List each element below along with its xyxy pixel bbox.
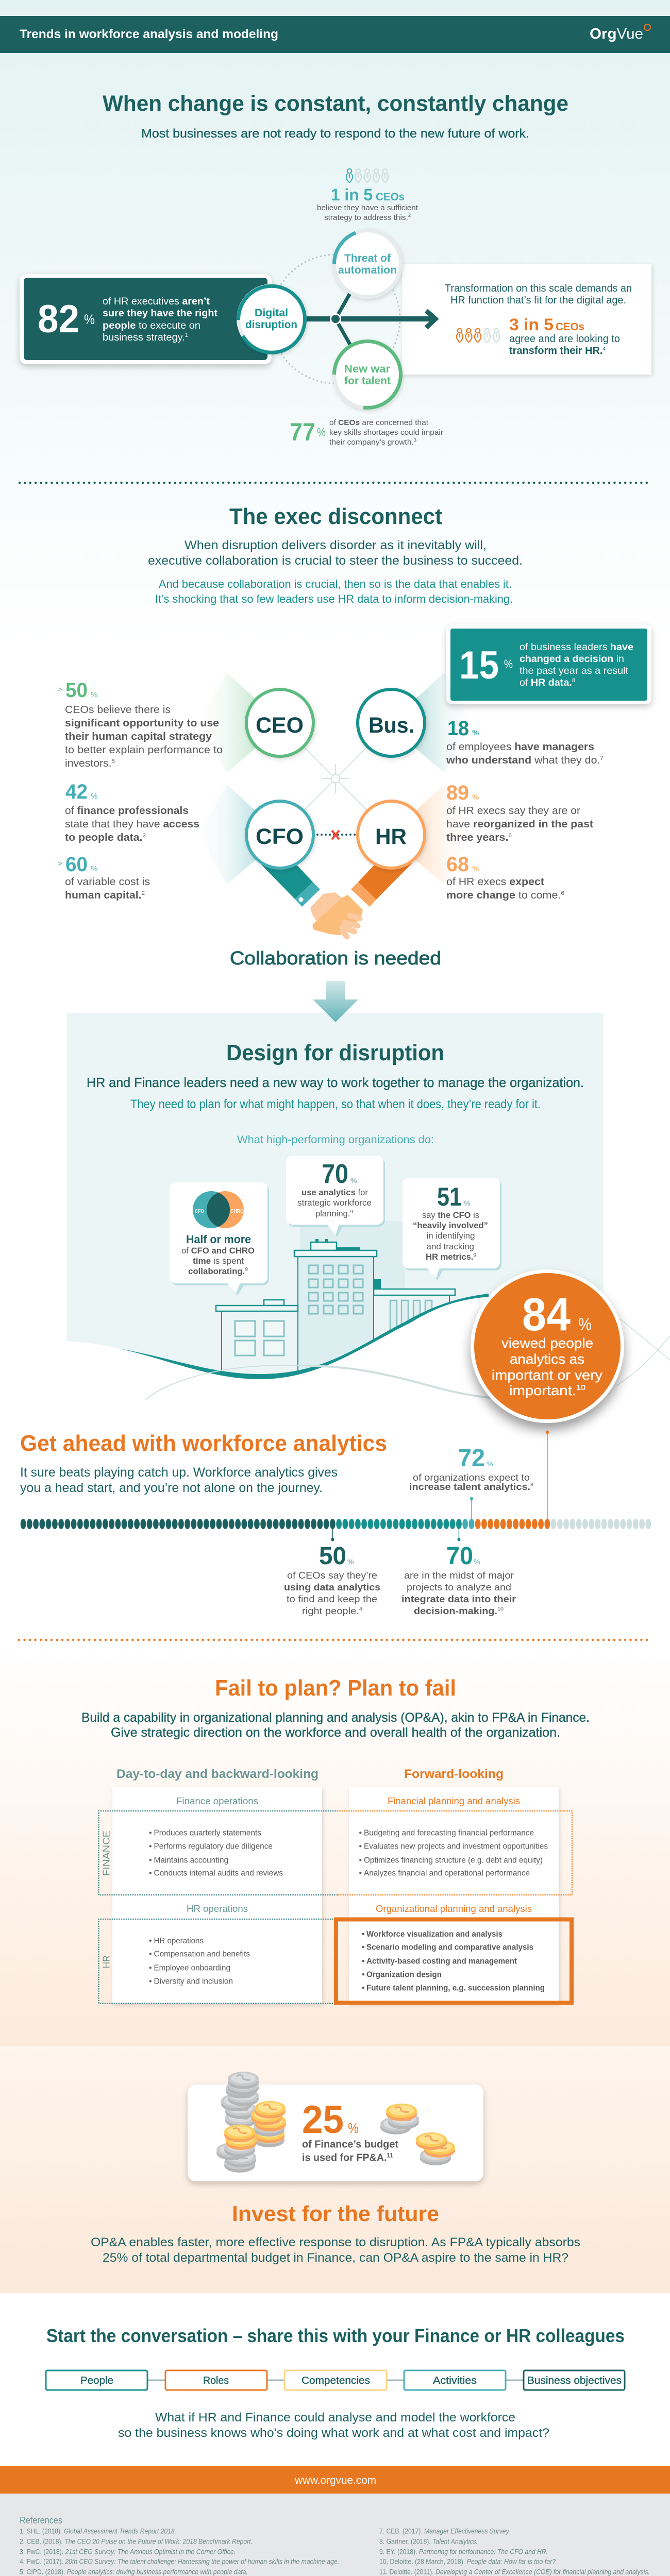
callout: 70%: % (350, 1176, 357, 1184)
design intro text: They need to plan for what might happen, so that when it does, they’re ready for it. (130, 1097, 541, 1111)
stat: 42%: of finance professionals (65, 805, 189, 817)
column heading: day-to-day: Day-to-day and backward-looking (116, 1767, 319, 1781)
top section background (0, 0, 670, 644)
financial planning and analysis: • (359, 1842, 362, 1851)
stat: 77% of CEOs: 3 (414, 437, 416, 443)
stat box: 15%: 8 (572, 677, 575, 684)
footer bar: website (0, 2466, 670, 2494)
reference list: left column: 1. SHL. (2018). Global Assessment Trends Report 2018. (20, 2528, 176, 2535)
HR operations: • (149, 1950, 152, 1959)
box: competencies: Competencies (301, 2375, 370, 2386)
arrow: down into design section (313, 981, 358, 1022)
broken link: CFO to HR (313, 831, 358, 839)
financial planning and analysis (359, 1795, 548, 1877)
HR operations: Diversity and inclusion (154, 1977, 233, 1986)
organizational planning and analysis: Organizational planning and analysis (376, 1903, 532, 1914)
stat: 42%: 2 (142, 833, 146, 839)
panel: 25 percent card: % (348, 2120, 359, 2136)
stat: 89%: % (472, 793, 479, 802)
stat: 18%: 7 (600, 755, 604, 761)
callout circle: 84%: viewed people (501, 1335, 593, 1351)
stat: more than 50%: to better explain performance to (65, 744, 223, 756)
stat: 70% in major projects: integrate data into their (401, 1594, 516, 1604)
organizational planning and analysis: Future talent planning, e.g. succession planning (366, 1984, 545, 1993)
organizational planning and analysis: • (362, 1970, 365, 1979)
callout: 51% (403, 1178, 501, 1280)
box: roles (165, 2370, 267, 2390)
grey background curves (145, 1319, 670, 1400)
dotted frame: finance row (99, 1811, 572, 1895)
organizational planning and analysis: Activity-based costing and management (366, 1957, 517, 1966)
callout: 70%: 70 (322, 1159, 348, 1189)
text: closing question (118, 2411, 549, 2440)
callout: 70% (286, 1156, 385, 1237)
stat: 1 in 5 CEOs: strategy to address this. (324, 213, 406, 222)
reference list: left column: 5. CIPD. (2018). People analytics: driving business performance with people data. (20, 2568, 248, 2576)
icon: coin stack left (216, 2072, 286, 2173)
stat: 68%: 6 (561, 890, 564, 896)
finance operations: Performs regulatory due diligence (154, 1842, 273, 1851)
stat: more than 60% (58, 853, 150, 901)
reference list: left column: 2. CEB. (2018). The CEO 20 Pulse on the Future of Work: 2018 Benchmark Report. (20, 2538, 253, 2545)
text: fail to plan intro: Build a capability in organizational planning and analysis (OP&A), akin to FP&A in Finance. (81, 1710, 590, 1725)
HR operations: • (149, 1964, 152, 1972)
chart: 100 pill percentage scale (20, 1519, 651, 1529)
marker: 70 percent (457, 1529, 460, 1541)
finance operations: Finance operations (176, 1795, 258, 1806)
dotted frame: HR row (99, 1919, 335, 2003)
panel: transformation: CEOs (556, 321, 584, 333)
circle: CEO: CEO (256, 713, 304, 738)
stat: 89%: three years. (446, 832, 504, 843)
panel: forward-looking column (349, 1787, 559, 2004)
illustration: office buildings (216, 1239, 455, 1393)
HR operations: HR operations (187, 1903, 248, 1914)
circle: digital disruption (237, 285, 306, 354)
reference list: left column: 3. PwC. (2018). 21st CEO Survey: The Anxious Optimist in the Corner Office. (20, 2548, 236, 2555)
organizational planning and analysis: • (362, 1930, 365, 1939)
stat: 1 in 5 CEOs (317, 169, 418, 222)
icon: five people, three highlighted (457, 329, 499, 342)
stat: more than 50%: investors. (65, 758, 109, 769)
stat: 77% of CEOs: key skills shortages could impair (329, 428, 443, 437)
text: get ahead intro (20, 1465, 338, 1495)
finance operations (149, 1795, 283, 1877)
circle: CFO: CFO (256, 824, 304, 849)
stat box: 15%: % (504, 657, 513, 671)
text: get ahead intro: It sure beats playing catch up. Workforce analytics gives (20, 1465, 338, 1480)
box: roles: Roles (203, 2375, 229, 2386)
box: activities: Activities (433, 2375, 477, 2386)
text: fail to plan intro (81, 1710, 590, 1740)
stat: 89% (446, 782, 593, 843)
section background: fail to plan (0, 1649, 670, 2046)
stat: 42%: state that they have access (65, 819, 199, 830)
stat: 50% of CEOs: right people. (302, 1605, 355, 1616)
stat: 18%: % (472, 728, 479, 737)
stat: 68%: more change to come. (446, 890, 558, 901)
intro text: exec disconnect: executive collaboration is crucial to steer the business to succeed. (148, 554, 523, 568)
stat: 18%: of employees have managers (446, 741, 594, 753)
stat: more than 60%: human capital. (65, 890, 137, 901)
stat: 50% of CEOs: to find and keep the (287, 1594, 377, 1604)
text: closing question: What if HR and Finance could analyse and model the workforce (155, 2411, 515, 2425)
panel: 25 percent card: 25 (302, 2098, 344, 2142)
marker: 72 percent (470, 1497, 473, 1519)
circle: new war for talent: New war (344, 363, 390, 375)
stat: 50% of CEOs: % (347, 1557, 354, 1566)
icon: coin stacks right (380, 2104, 455, 2165)
stat box: 82% (20, 274, 272, 364)
finance operations: • (149, 1829, 152, 1837)
stat: more than 60%: > (58, 859, 62, 868)
stat box: 82%: sure they have the right (103, 308, 218, 319)
callout circle: 84%: 10 (576, 1383, 585, 1392)
circle: HR: HR (375, 824, 407, 849)
box: business objectives: Business objectives (527, 2375, 622, 2386)
callout: 51%: 9 (473, 1252, 476, 1258)
stat: 50% of CEOs: of CEOs say they’re (287, 1570, 377, 1581)
stat box: 82%: people to execute on (103, 320, 200, 331)
stat: more than 60%: 60 (65, 853, 88, 876)
heading: collaboration is needed: Collaboration is needed (230, 947, 441, 969)
reference list: left column (20, 2528, 339, 2576)
heading: the exec disconnect: The exec disconnect (229, 504, 442, 529)
box: activities (404, 2370, 506, 2390)
organizational planning and analysis (362, 1903, 545, 1993)
stat: more than 50%: 50 (65, 679, 88, 702)
callout: half or more: time is spent (193, 1257, 244, 1266)
stat: 42%: % (91, 792, 97, 801)
intro text: exec disconnect (148, 538, 523, 605)
panel: transformation: transform their HR. (509, 345, 603, 357)
connector star between executives (280, 723, 391, 835)
HR operations: Compensation and benefits (154, 1950, 250, 1959)
text: fail to plan intro: Give strategic direction on the workforce and overall health of the organization. (111, 1725, 560, 1740)
panel: references: References (20, 2515, 62, 2526)
stat: 72%: % (487, 1460, 493, 1468)
stat box: 82%: 1 (185, 332, 188, 338)
callout: 70%: 9 (350, 1209, 353, 1215)
intro text: exec disconnect: And because collaboration is crucial, then so is the data that enables it. (159, 578, 512, 590)
callout: 70%: planning. (315, 1209, 350, 1218)
financial planning and analysis: Budgeting and forecasting financial performance (364, 1829, 534, 1837)
circle: CEO (246, 689, 313, 756)
stat: 42%: to people data. (65, 832, 138, 843)
HR operations: • (149, 1977, 152, 1986)
chain of connected boxes (46, 2370, 625, 2390)
stat box: 15%: of business leaders have (520, 641, 633, 653)
teal ground curve (120, 1294, 489, 1379)
header title: Trends in workforce analysis and modeling (20, 27, 278, 41)
right building (374, 1279, 455, 1393)
financial planning and analysis: Financial planning and analysis (388, 1795, 520, 1806)
marker: 50 percent (331, 1529, 334, 1541)
stat box: 82%: 82 (38, 297, 79, 341)
stat: 89%: have reorganized in the past (446, 819, 593, 830)
finance operations: Produces quarterly statements (154, 1829, 261, 1837)
stat: 68%: of HR execs expect (446, 876, 544, 888)
intro text: exec disconnect: When disruption delivers disorder as it inevitably will, (185, 538, 487, 552)
reference list: right column: 7. CEB. (2017). Manager Effectiveness Survey. (379, 2528, 510, 2535)
stat: 70% in major projects: 70 (446, 1543, 473, 1570)
stat: 1 in 5 CEOs: 1 in 5 (331, 185, 373, 204)
box: business objectives (524, 2370, 625, 2390)
venn diagram: CFO and CHRO: CHRO (230, 1209, 244, 1214)
stat: 72%: of organizations expect to (413, 1472, 530, 1483)
panel: transformation: 3 in 5 (509, 315, 554, 334)
stat: 50% of CEOs: using data analytics (284, 1582, 380, 1592)
row label: finance: FINANCE (101, 1831, 111, 1876)
stat: 77% of CEOs: 77 (290, 419, 315, 446)
panel: references (0, 2494, 670, 2576)
circle: digital disruption: disruption (245, 319, 297, 331)
organizational planning and analysis: • (362, 1943, 365, 1952)
panel: backward-looking column (112, 1787, 322, 2004)
circle: new war for talent (334, 341, 401, 408)
stat box: 15%: of HR data. (520, 677, 572, 688)
panel: transformation: agree and are looking to (509, 333, 620, 345)
HR operations: Employee onboarding (154, 1964, 230, 1972)
callout: 51%: say the CFO is (422, 1211, 479, 1220)
callout: 70%: strategic workforce (297, 1198, 372, 1208)
stat: 77% of CEOs (290, 418, 443, 447)
stat: 68%: % (472, 865, 479, 873)
box: people: People (80, 2375, 113, 2386)
stat: 1 in 5 CEOs: 2 (408, 213, 411, 218)
highlight box: organizational planning (336, 1920, 572, 2003)
stat: 77% of CEOs: % (317, 426, 326, 439)
glow fans behind executive circles (198, 672, 472, 885)
stat box: 15%: 15 (459, 643, 499, 687)
callout circle: 84%: important or very (492, 1367, 603, 1383)
stat: 50% of CEOs: 50 (319, 1543, 346, 1570)
header bar (0, 16, 670, 53)
HR operations: HR operations (154, 1937, 204, 1945)
callout: half or more: of CFO and CHRO (181, 1246, 255, 1256)
heading: fail to plan: Fail to plan? Plan to fail (215, 1675, 456, 1701)
venn diagram: CFO and CHRO (193, 1191, 244, 1228)
stat: 70% in major projects: decision-making. (414, 1605, 492, 1616)
footer bar: website: www.orgvue.com (294, 2475, 376, 2486)
circle: threat of automation: Threat of (344, 252, 391, 264)
callout circle: 84%: % (578, 1315, 592, 1334)
reference list: left column: 4. PwC. (2017). 20th CEO Survey: The talent challenge: Harnessing the power of human skills in the machine age. (20, 2557, 339, 2566)
stat: 50% of CEOs: 4 (359, 1606, 362, 1612)
stat: more than 50% (58, 679, 223, 769)
stat: 42%: 42 (65, 781, 88, 803)
finance operations: • (149, 1842, 152, 1851)
financial planning and analysis: • (359, 1829, 362, 1837)
callout: half or more: collaborating. (188, 1267, 244, 1276)
intro text: exec disconnect: It’s shocking that so few leaders use HR data to inform decision-making. (155, 592, 513, 605)
circle: Business (358, 689, 425, 756)
reference list: right column: 9. EY. (2018). Partnering for performance: The CFO and HR. (379, 2548, 548, 2555)
box: people (46, 2370, 147, 2390)
stat: 42% (65, 781, 199, 843)
stat: 89%: 89 (446, 782, 469, 804)
title: When change is constant, constantly change (103, 91, 568, 116)
organizational planning and analysis: Organization design (366, 1970, 442, 1979)
text: invest intro (91, 2235, 580, 2265)
stat: more than 50%: % (91, 690, 97, 699)
callout circle: 84%: important. (509, 1383, 571, 1398)
stat: 77% of CEOs: their company’s growth. (329, 438, 411, 447)
callout: 51%: HR metrics. (426, 1252, 473, 1262)
panel: transformation (402, 264, 651, 375)
stat: 18%: 18 (447, 717, 469, 740)
callout: 51%: % (464, 1199, 470, 1207)
design intro text: What high-performing organizations do: (237, 1134, 434, 1146)
stat: 72% (409, 1445, 533, 1492)
icon: handshake (259, 862, 412, 937)
financial planning and analysis: Evaluates new projects and investment opportunities (364, 1842, 548, 1851)
heading: get ahead with workforce analytics: Get ahead with workforce analytics (20, 1431, 387, 1456)
organizational planning and analysis: Workforce visualization and analysis (366, 1930, 502, 1939)
stat: 70% in major projects (401, 1543, 516, 1616)
callout: 51%: “heavily involved” (413, 1221, 488, 1230)
panel: 25 percent card: of Finance’s budget (302, 2139, 398, 2150)
callout: 51%: 51 (437, 1182, 462, 1211)
column heading: forward-looking: Forward-looking (404, 1767, 504, 1781)
design intro text: HR and Finance leaders need a new way to work together to manage the organization. (87, 1075, 584, 1090)
circle: threat of automation: automation (338, 264, 397, 276)
stat box: 82%: of HR executives aren’t (103, 296, 210, 307)
heading: start the conversation: Start the conversation – share this with your Finance or HR colleagues (46, 2325, 625, 2346)
circle: threat of automation (334, 231, 401, 297)
panel: design for disruption (66, 1013, 604, 1394)
circle: HR (358, 801, 425, 868)
stat: more than 50%: their human capital strategy (65, 731, 212, 742)
finance operations: Conducts internal audits and reviews (154, 1869, 283, 1877)
stat: more than 60%: % (91, 865, 97, 873)
stat box: 82%: business strategy. (103, 332, 183, 343)
left building (216, 1300, 298, 1392)
reference list: right column: 8. Gartner. (2018). Talent Analytics. (379, 2538, 478, 2545)
stat: 1 in 5 CEOs: believe they have a sufficient (317, 204, 418, 212)
financial planning and analysis: • (359, 1869, 362, 1877)
text: closing question: so the business knows who’s doing what work and at what cost and impact? (118, 2426, 549, 2440)
callout: half or more: 9 (245, 1267, 248, 1273)
stat: 68% (446, 853, 564, 901)
design intro text (87, 1075, 584, 1146)
stat box: 15%: changed a decision in (520, 653, 624, 665)
stat: 77% of CEOs: of CEOs are concerned that (329, 418, 429, 427)
circle: Business: Bus. (368, 713, 414, 738)
callout circle: 84%: analytics as (510, 1351, 584, 1367)
stat: more than 50%: 5 (112, 758, 115, 765)
callout: 51%: in identifying (427, 1231, 475, 1241)
stat: 72%: 72 (458, 1445, 485, 1472)
financial planning and analysis: • (359, 1856, 362, 1865)
panel: transformation: HR function that’s fit for the digital age. (450, 295, 626, 306)
venn diagram: CFO and CHRO: CFO (195, 1209, 204, 1214)
stat: 18% (446, 717, 604, 766)
row label: HR: HR (101, 1956, 111, 1968)
financial planning and analysis: Optimizes financing structure (e.g. debt and equity) (364, 1856, 543, 1865)
tall building (294, 1239, 377, 1392)
reference list: right column: 10. Deloitte. (28 March, 2018). People data: How far is too far? (379, 2557, 556, 2566)
dotted circle around the hub (271, 255, 400, 383)
stat: 89%: 6 (508, 833, 512, 839)
circle: CFO (246, 801, 313, 868)
stat: 70% in major projects: % (474, 1557, 480, 1566)
stat box: 15%: the past year as a result (520, 665, 629, 676)
text: invest intro: OP&A enables faster, more effective response to disruption. As FP&A typically absorbs (91, 2235, 580, 2249)
stat: more than 50%: > (58, 685, 62, 694)
white swoosh under buildings (0, 1294, 608, 1427)
stat: 70% in major projects: projects to analyze and (407, 1582, 511, 1592)
circle: new war for talent: for talent (344, 375, 391, 387)
stat: 70% in major projects: 10 (497, 1606, 504, 1612)
panel: 25 percent card (188, 2084, 483, 2181)
finance operations: • (149, 1856, 152, 1865)
stat: 72%: 8 (530, 1482, 533, 1488)
OrgVue logo: OrgVue (590, 26, 643, 42)
callout circle: 84%: 84 (522, 1289, 571, 1341)
callout: 70%: use analytics for (301, 1188, 368, 1197)
box: competencies (284, 2370, 387, 2390)
stat: 89%: of HR execs say they are or (446, 805, 580, 817)
heading: invest for the future: Invest for the future (232, 2201, 439, 2226)
callout: half or more (170, 1182, 269, 1295)
stat box: 82%: % (84, 312, 95, 327)
callout circle: 84% (471, 1269, 624, 1423)
panel: transformation: 4 (602, 346, 606, 352)
finance operations: • (149, 1869, 152, 1877)
HR operations (149, 1903, 250, 1986)
callout: half or more: Half or more (186, 1233, 251, 1246)
arrow: hub to transformation (304, 293, 435, 345)
callout: 51%: and tracking (427, 1242, 474, 1251)
stat: 1 in 5 CEOs: CEOs (376, 191, 405, 203)
reference list: right column: 11. Deloitte. (2011). Developing a Center of Excellence (COE) for financial planning and analysis. (379, 2568, 650, 2576)
panel: 25 percent card: 11 (387, 2151, 393, 2159)
financial planning and analysis: Analyzes financial and operational performance (364, 1869, 530, 1877)
stat: 18%: who understand what they do. (446, 755, 596, 766)
heading: design for disruption: Design for disruption (226, 1040, 444, 1065)
reference list: right column (379, 2528, 650, 2576)
stat: 50% of CEOs (284, 1543, 380, 1616)
HR operations: • (149, 1937, 152, 1945)
section background: invest for the future (0, 2046, 670, 2293)
stat box: 15% (446, 624, 651, 704)
panel: transformation: Transformation on this scale demands an (445, 283, 632, 294)
text: get ahead intro: you a head start, and you’re not alone on the journey. (20, 1481, 323, 1495)
stat: 68%: 68 (446, 853, 469, 876)
stat: 70% in major projects: are in the midst of major (404, 1570, 514, 1581)
marker: 84 percent (546, 1430, 549, 1519)
finance operations: Maintains accounting (154, 1856, 228, 1865)
organizational planning and analysis: • (362, 1957, 365, 1966)
stat: more than 50%: CEOs believe there is (65, 704, 171, 716)
stat: more than 60%: of variable cost is (65, 876, 150, 888)
circle: digital disruption: Digital (255, 307, 288, 319)
panel: 25 percent card: is used for FP&A. (302, 2153, 388, 2164)
stat: more than 60%: 2 (142, 890, 145, 896)
organizational planning and analysis: • (362, 1984, 365, 1993)
subtitle: Most businesses are not ready to respond to the new future of work. (141, 127, 529, 141)
text: invest intro: 25% of total departmental budget in Finance, can OP&A aspire to the same in HR? (103, 2251, 568, 2265)
organizational planning and analysis: Scenario modeling and comparative analysis (366, 1943, 533, 1952)
stat: more than 50%: significant opportunity to use (65, 718, 219, 729)
stat: 72%: increase talent analytics. (409, 1481, 522, 1492)
icon: five people, one highlighted (346, 169, 388, 182)
